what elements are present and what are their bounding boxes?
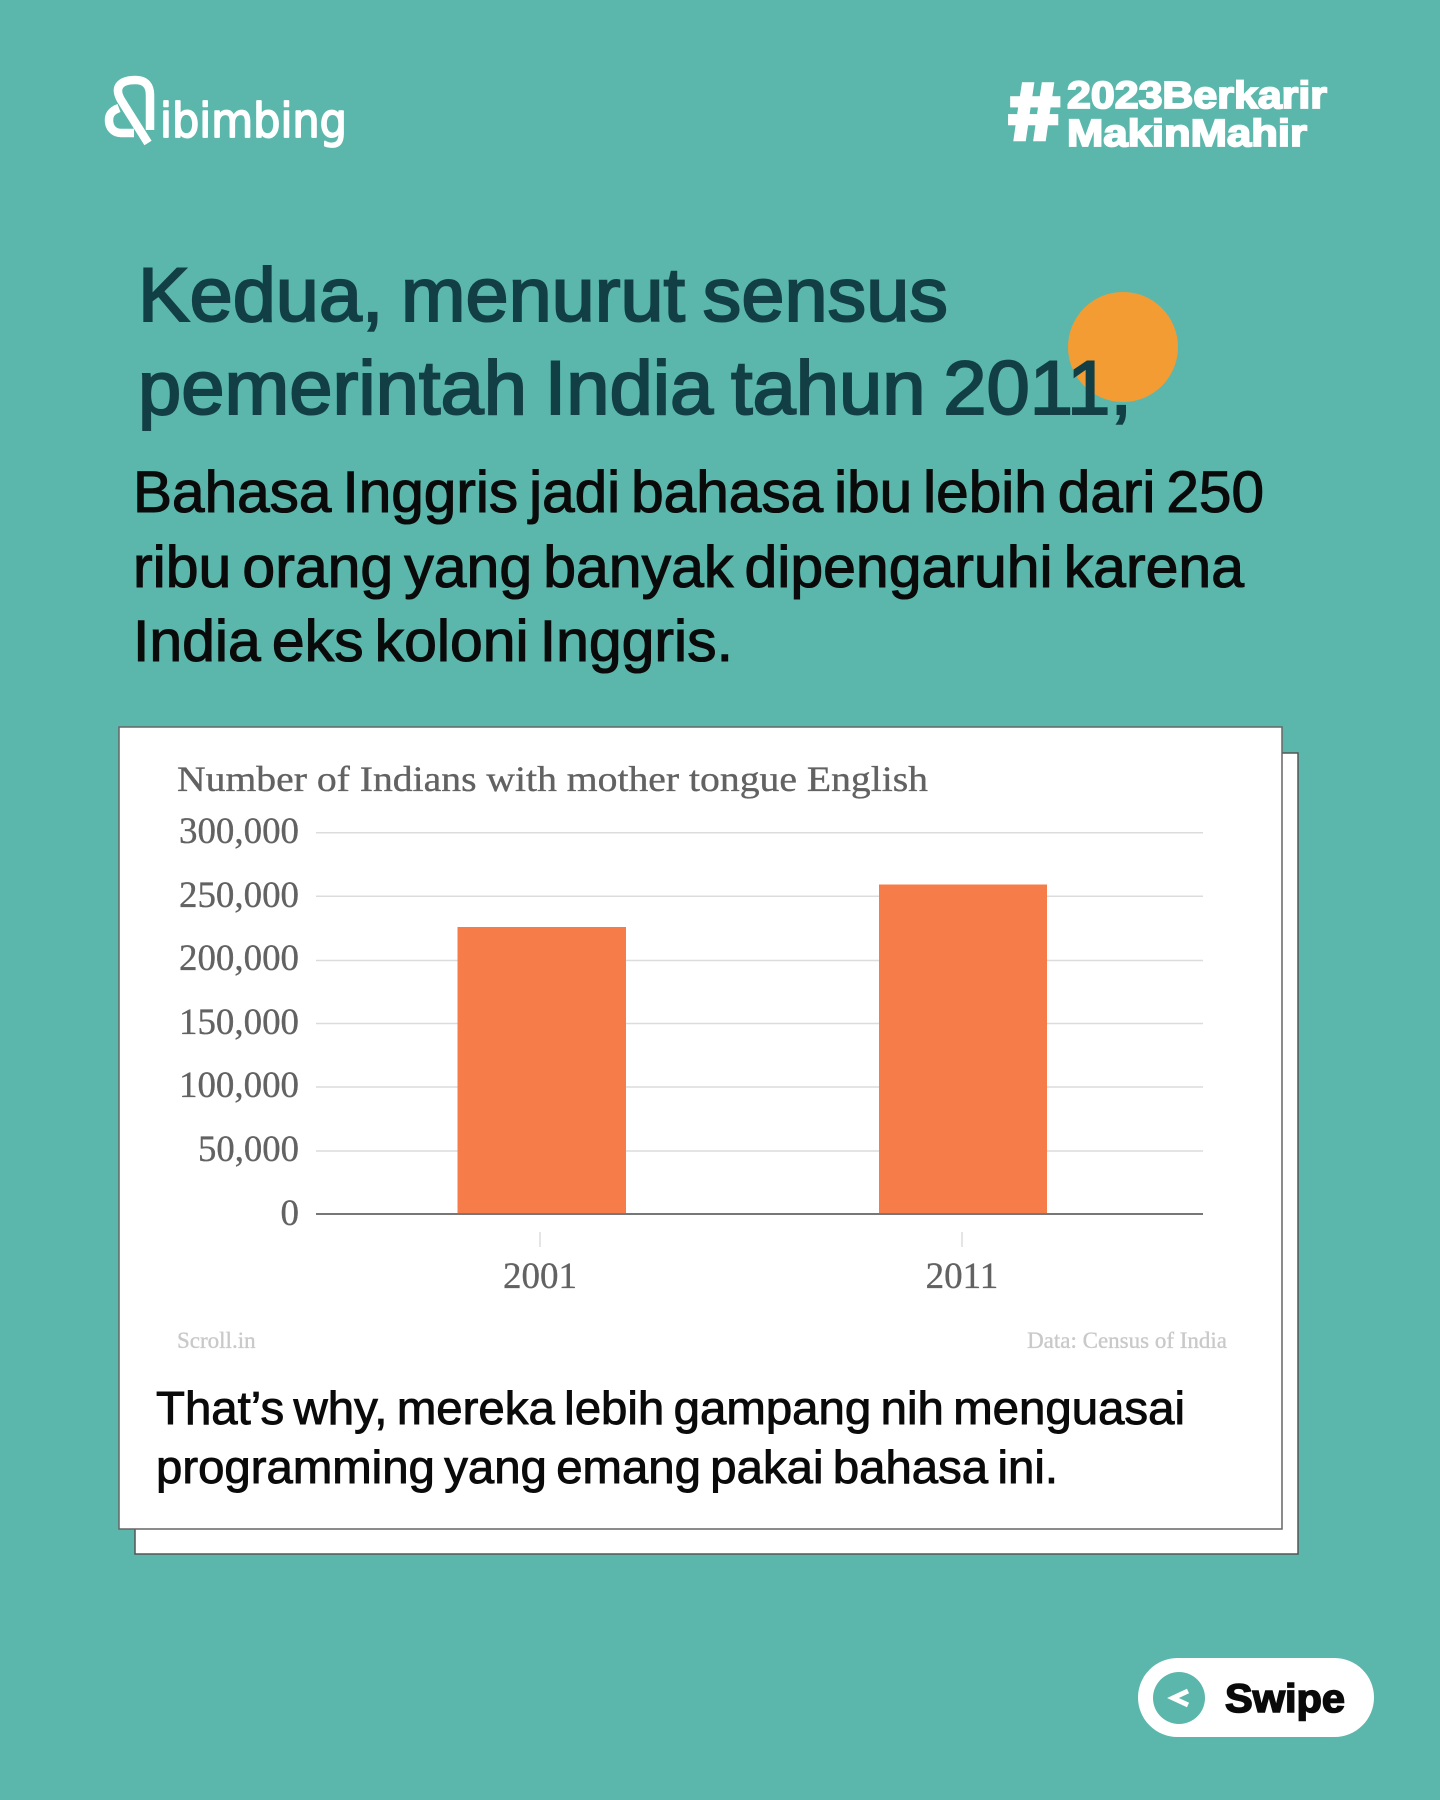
bar chart: 2001 — [503, 1256, 577, 1297]
bar chart: 300,000 — [179, 811, 299, 852]
chart credits: Scroll.in — [177, 1328, 256, 1353]
hashtag: MakinMahir — [1067, 113, 1307, 155]
bar chart: 100,000 — [179, 1065, 299, 1106]
bar chart: 150,000 — [179, 1002, 299, 1043]
swipe button: Swipe — [1225, 1677, 1345, 1721]
intro text: ribu orang yang banyak dipengaruhi karena — [133, 535, 1245, 600]
swipe button — [1138, 1658, 1374, 1737]
chart credits — [177, 1328, 1227, 1353]
caption text: programming yang emang pakai bahasa ini. — [156, 1441, 1058, 1493]
chart credits: Data: Census of India — [1027, 1328, 1227, 1353]
icon: chevron left — [1153, 1672, 1205, 1724]
logo: ibimbing: ibimbing — [160, 94, 347, 149]
intro text: India eks koloni Inggris. — [133, 609, 733, 674]
title: pemerintah India tahun 2011, — [138, 346, 1132, 431]
logo: ibimbing — [109, 80, 347, 149]
bar chart: 0 — [280, 1193, 299, 1234]
caption text: That’s why, mereka lebih gampang nih menguasai — [156, 1382, 1185, 1434]
intro text — [133, 460, 1264, 674]
intro text: Bahasa Inggris jadi bahasa ibu lebih dari 250 — [133, 460, 1264, 525]
bar chart — [179, 811, 1203, 1297]
hashtag: 2023Berkarir — [1067, 75, 1327, 117]
bar chart: 50,000 — [198, 1129, 299, 1170]
chart title: Number of Indians with mother tongue English — [177, 759, 928, 799]
caption text — [156, 1382, 1185, 1493]
hashtag — [1006, 52, 1327, 162]
panel: back sheet — [135, 753, 1298, 1554]
panel: chart card — [119, 727, 1282, 1529]
bar chart: 250,000 — [179, 875, 299, 916]
decorative orange circle — [1068, 292, 1178, 402]
title — [138, 253, 1132, 431]
bar chart: 2011 — [926, 1256, 998, 1297]
hashtag: # — [1006, 52, 1062, 162]
title: Kedua, menurut sensus — [138, 253, 948, 338]
bar chart: 200,000 — [179, 938, 299, 979]
